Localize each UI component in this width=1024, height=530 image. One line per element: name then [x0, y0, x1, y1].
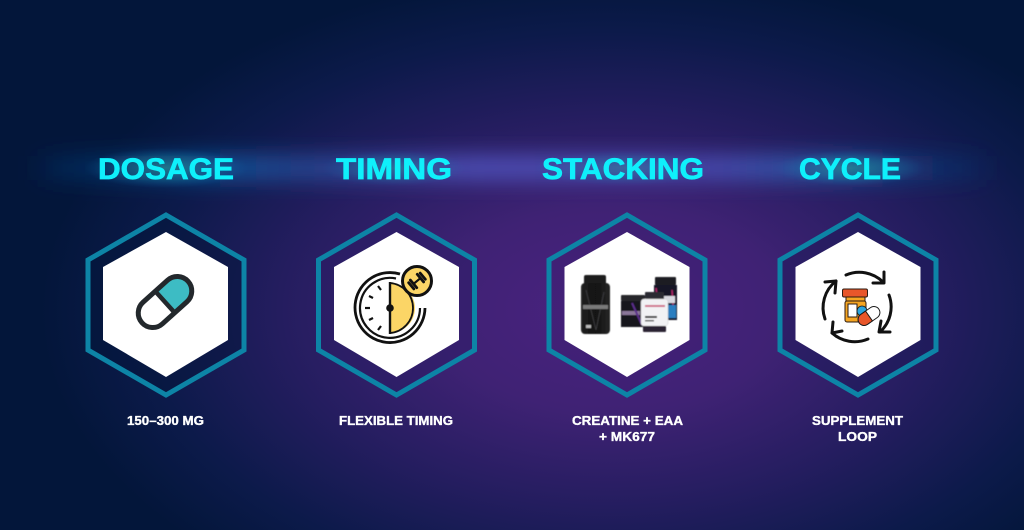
- hexagon frame: timing: [318, 215, 474, 395]
- hexagon tile: stacking: [564, 232, 690, 377]
- heading: timing: TIMING: [336, 153, 452, 186]
- panel: dosage: [88, 153, 244, 428]
- pills: [856, 304, 882, 328]
- panel: cycle: [780, 153, 936, 444]
- hexagon tile: cycle: [796, 232, 920, 377]
- hexagon frame: dosage: [88, 215, 244, 395]
- panel: timing: [318, 153, 474, 428]
- icon: supplement loop: [823, 272, 891, 342]
- label: timing: FLEXIBLE TIMING: [339, 413, 453, 428]
- heading: dosage: DOSAGE: [98, 153, 234, 186]
- label: cycle line 1: SUPPLEMENT: [812, 413, 903, 428]
- label: cycle line 2: LOOP: [838, 429, 877, 444]
- circular arrows: [823, 272, 891, 342]
- label: dosage: 150–300 MG: [127, 413, 204, 428]
- label: stacking line 2: + MK677: [599, 429, 655, 444]
- hexagon frame: stacking: [549, 215, 705, 395]
- dark tub: [621, 295, 645, 327]
- icon: capsule pill: [132, 270, 198, 334]
- panel: stacking: [542, 153, 705, 444]
- icon: supplement bottles: [581, 275, 677, 334]
- hexagon tile: dosage: [103, 232, 228, 377]
- hexagon frame: cycle: [780, 215, 936, 395]
- bottle: [842, 289, 868, 322]
- heading: stacking: STACKING: [542, 153, 704, 186]
- heading: cycle: CYCLE: [799, 153, 901, 186]
- icon: stopwatch with dumbbell: [355, 266, 432, 343]
- tall back tub: [654, 277, 677, 320]
- large black bottle: [581, 275, 610, 334]
- label: stacking line 1: CREATINE + EAA: [572, 413, 684, 428]
- white bottle: [641, 292, 668, 332]
- hexagon tile: timing: [334, 232, 459, 377]
